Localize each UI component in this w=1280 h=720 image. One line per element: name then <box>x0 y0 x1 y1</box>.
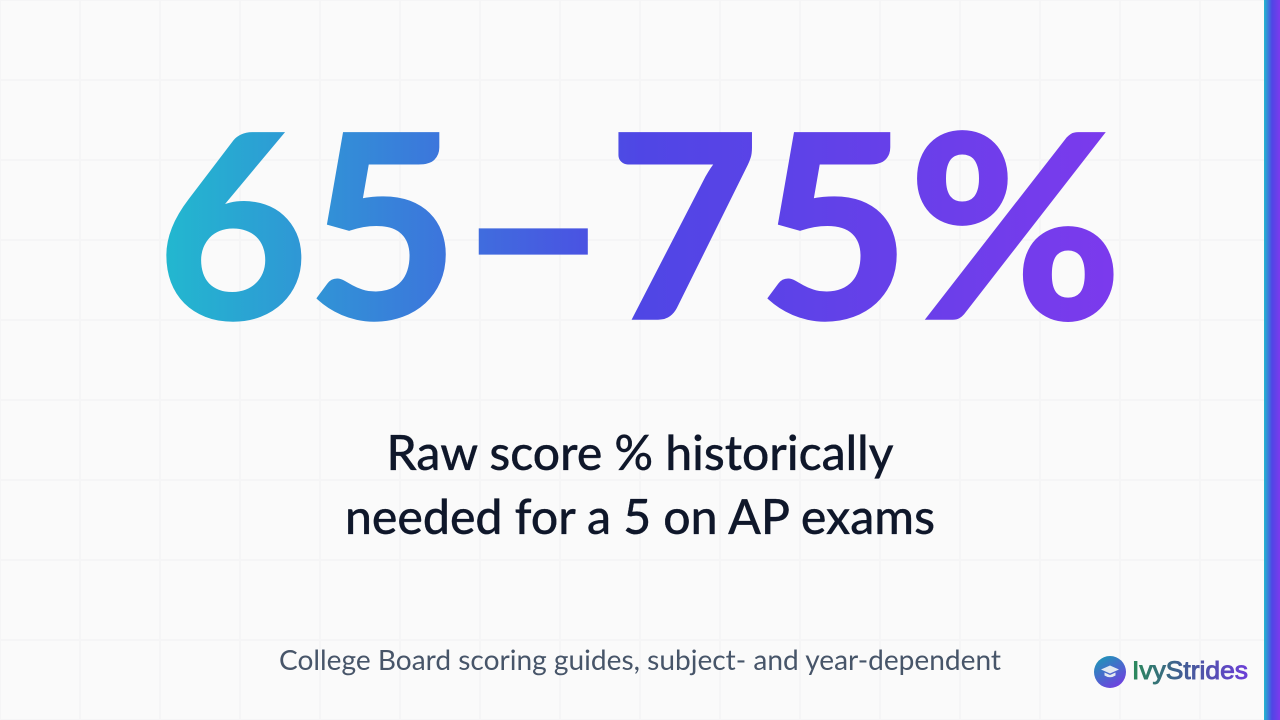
big statistic: 65–75% <box>158 68 1122 373</box>
subtitle: Raw score % historically <box>386 424 894 481</box>
subtitle <box>345 424 935 545</box>
icon: graduation cap badge <box>1094 656 1126 688</box>
source note: College Board scoring guides, subject- and year-dependent <box>279 642 1001 676</box>
subtitle: needed for a 5 on AP exams <box>345 488 935 545</box>
wordmark: IvyStrides <box>1132 657 1248 685</box>
logo: IvyStrides <box>1094 656 1248 688</box>
accent stripe <box>1264 0 1280 720</box>
